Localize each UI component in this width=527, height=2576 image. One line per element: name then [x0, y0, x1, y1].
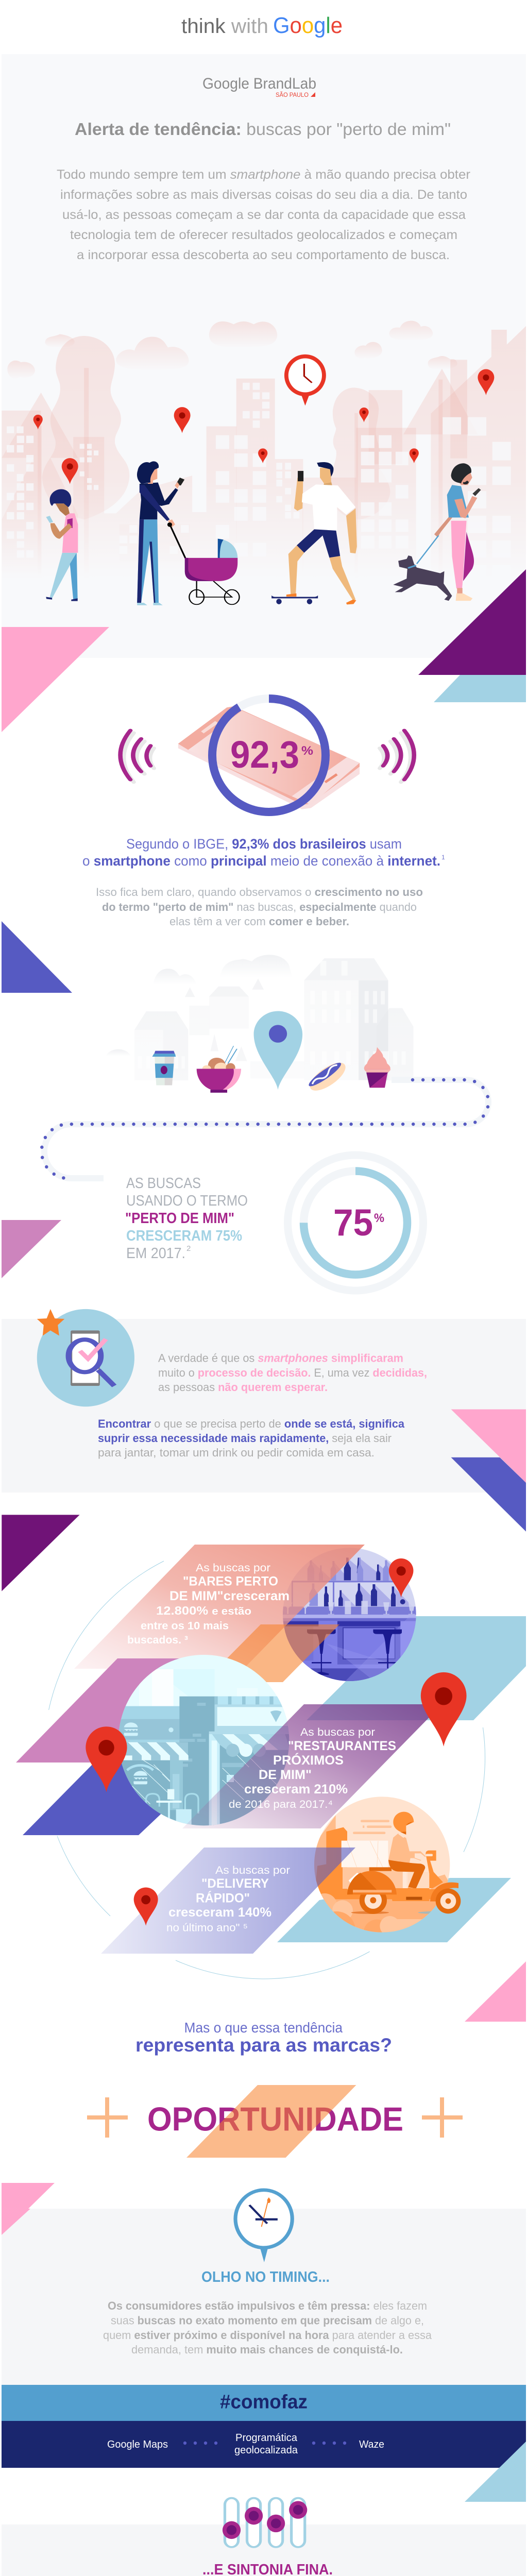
front wheel — [430, 1883, 458, 1902]
text: perto de mim growth: elas têm a ver com comer e beber. — [169, 915, 349, 928]
text: timing paragraph — [103, 2299, 432, 2356]
text: programática geolocalizada — [234, 2432, 298, 2456]
decoration: pink triangle right — [465, 1961, 526, 2022]
icons: food and drink — [152, 1046, 391, 1096]
ice cream — [364, 1047, 391, 1088]
decoration: blue triangle — [2, 921, 72, 993]
panel: intro background — [2, 54, 526, 658]
intro text block: usá-lo, as pessoas começam a se dar conta da capacidade que essa — [62, 208, 466, 222]
text: IBGE smartphone stat: Segundo o IBGE, 92,3% dos brasileiros usam — [126, 836, 402, 852]
light blue parallelogram — [307, 1616, 526, 1720]
text: Google Maps: Google Maps — [107, 2439, 168, 2450]
donut chart: 75%: % — [374, 1211, 384, 1225]
decoration: corner shapes top — [2, 569, 526, 732]
clouds — [7, 321, 457, 379]
text: restaurantes stat: DE MIM" — [259, 1768, 312, 1782]
coffee cup — [152, 1051, 176, 1086]
text: restaurantes stat: cresceram 210% — [244, 1782, 348, 1797]
panel: restaurantes próximos — [16, 1654, 467, 1835]
right storefront — [209, 1732, 292, 1734]
intro text block: Todo mundo sempre tem um smartphone à mão quando precisa obter — [57, 167, 470, 182]
icons: location pins — [33, 369, 494, 484]
text: perto de mim growth — [96, 886, 423, 928]
scooter body — [390, 1851, 443, 1901]
text: IBGE smartphone stat — [82, 836, 445, 869]
gradient parallelogram — [101, 1848, 355, 1954]
pins — [86, 1672, 467, 1792]
donut chart: 92.3%: % — [301, 744, 313, 758]
heading: olho no timing: OLHO NO TIMING... — [201, 2269, 330, 2285]
rider — [388, 1833, 426, 1867]
text: restaurantes stat: de 2016 para 2017.⁴ — [229, 1799, 333, 1810]
mauve parallelogram — [16, 1658, 215, 1762]
text: smartphones simplified: as pessoas não querem esperar. — [158, 1381, 328, 1394]
text: timing paragraph: Os consumidores estão impulsivos e têm pressa: eles fazem — [108, 2299, 427, 2312]
bottle shadows — [308, 1557, 412, 1606]
illustration: grey city with food and pin — [106, 955, 413, 1090]
decoration: pink triangle over panel — [2, 2209, 30, 2235]
text: buscas cresceram 75%: AS BUSCAS — [126, 1175, 201, 1192]
text: perto de mim growth: Isso fica bem claro, quando observamos o crescimento no uso — [96, 886, 423, 899]
decoration: pink triangle left — [2, 2183, 55, 2235]
text: buscas cresceram 75%: 2 — [186, 1244, 191, 1253]
decoration: right corner shapes — [2, 1410, 526, 1591]
rear fender — [349, 1873, 360, 1884]
person: woman with stroller — [137, 461, 240, 605]
donut chart: 75%: 75 — [333, 1202, 373, 1244]
logo: think with Google: Google — [273, 13, 343, 38]
illustration: delivery scooter — [314, 1797, 461, 1933]
icon: red clock — [284, 354, 326, 405]
text: restaurantes stat: PRÓXIMOS — [273, 1752, 344, 1768]
text: delivery stat: RÁPIDO" — [196, 1891, 250, 1905]
text: smartphones simplified: muito o processo de decisão. E, uma vez decididas, — [158, 1366, 427, 1379]
text: encontrar perto — [98, 1417, 405, 1459]
illustration: bar — [282, 1547, 418, 1681]
text: bares perto de mim stat: As buscas por — [196, 1562, 270, 1574]
text: encontrar perto: Encontrar o que se precisa perto de onde se está, significa — [98, 1417, 405, 1430]
panel: delivery rápido — [101, 1795, 511, 1954]
left awning — [118, 1742, 188, 1760]
person: woman walking dog — [393, 463, 481, 601]
panel: decision process — [2, 1319, 526, 1493]
text: buscas cresceram 75% — [125, 1175, 248, 1262]
burger sign lower — [133, 1771, 147, 1784]
decoration: light blue triangle — [465, 2442, 526, 2502]
panel: sintonia fina — [2, 2524, 526, 2576]
icon: magnifier over phone with star — [37, 1309, 134, 1406]
text: bares perto de mim stat: DE MIM"cresceram — [169, 1589, 290, 1603]
logo: Google BrandLab São Paulo: SÃO PAULO — [276, 91, 309, 98]
panel: #comofaz blue — [2, 2385, 526, 2468]
text: smartphones simplified: A verdade é que os smartphones simplificaram — [158, 1352, 403, 1364]
text: bares perto de mim stat — [127, 1562, 290, 1646]
logo: think with Google: think with — [181, 15, 268, 38]
person: child with phone — [46, 489, 78, 601]
illustration: pale city skyline — [2, 321, 526, 601]
text: restaurantes stat: "RESTAURANTES — [288, 1739, 396, 1753]
text: Waze: Waze — [359, 2439, 384, 2450]
text: restaurantes stat: As buscas por — [300, 1726, 375, 1738]
text: bares perto de mim stat: "BARES PERTO — [183, 1574, 278, 1589]
grey clouds — [106, 955, 293, 1056]
title: Alerta de tendência: buscas por "perto de mim" — [75, 120, 451, 139]
text: buscas cresceram 75%: USANDO O TERMO — [126, 1193, 248, 1209]
bottles — [324, 1557, 396, 1606]
logo: Google BrandLab São Paulo: Google BrandLab — [202, 75, 316, 92]
text: timing paragraph: quem estiver próximo e disponível na hora para atender a essa — [103, 2329, 432, 2342]
donut chart: 75% — [287, 1155, 423, 1291]
donut chart: 92.3%: 92,3 — [230, 733, 299, 776]
icon: blue clock — [233, 2188, 294, 2262]
panel: olho no timing — [2, 2209, 526, 2385]
stools — [307, 1630, 402, 1675]
shelves — [292, 1581, 416, 1582]
heading: what it means for brands — [135, 2020, 392, 2056]
text: smartphones simplified — [158, 1352, 427, 1394]
table and chairs — [146, 1794, 198, 1814]
pin — [389, 1558, 413, 1598]
intro text block: tecnologia tem de oferecer resultados geolocalizados e começam — [70, 228, 457, 242]
gradient parallelogram — [74, 1545, 365, 1669]
gradient parallelogram — [182, 1704, 442, 1828]
callout: oportunidade: OPORTUNIDADE — [147, 2100, 403, 2138]
trees — [38, 336, 443, 601]
text: delivery stat: As buscas por — [215, 1865, 290, 1876]
text: buscas cresceram 75%: CRESCERAM 75% — [126, 1228, 242, 1244]
dark wall — [179, 1697, 215, 1827]
icon: plus right — [422, 2097, 463, 2138]
decoration: thin circle arcs — [49, 1561, 485, 1979]
rear wheel — [360, 1887, 387, 1914]
text: programática geolocalizada: Programática — [235, 2432, 298, 2444]
intro text block: a incorporar essa descoberta ao seu comportamento de busca. — [77, 248, 450, 262]
text: IBGE smartphone stat: o smartphone como principal meio de conexão à internet. — [82, 853, 440, 869]
text: restaurantes stat — [229, 1726, 396, 1810]
illustration: phone with signal waves — [121, 706, 414, 809]
illustration: restaurant — [117, 1654, 292, 1827]
text: timing paragraph: demanda, tem muito mais chances de conquistá-lo. — [131, 2343, 403, 2356]
large pin — [254, 1011, 302, 1090]
dotted route — [42, 1080, 488, 1178]
heading: what it means for brands: representa para as marcas? — [135, 2035, 392, 2056]
text: delivery stat: no último ano" ⁵ — [166, 1922, 248, 1934]
donut chart: 92.3% — [212, 699, 326, 812]
text: bares perto de mim stat: buscados. ³ — [127, 1634, 188, 1646]
panel: bares perto de mim — [74, 1545, 526, 1720]
text: perto de mim growth: do termo "perto de mim" nas buscas, especialmente quando — [102, 901, 417, 913]
signal waves left and right — [121, 731, 414, 782]
text: programática geolocalizada: geolocalizada — [234, 2445, 298, 2456]
icon: sliders — [223, 2498, 307, 2547]
intro text block — [57, 167, 470, 262]
burger sign top — [124, 1722, 138, 1736]
decoration: mauve triangle — [2, 1220, 61, 1278]
text: bares perto de mim stat: 12.800% e estão — [156, 1604, 251, 1617]
blue parallelogram — [23, 1762, 215, 1835]
buildings — [2, 326, 526, 579]
text: delivery stat — [166, 1865, 290, 1934]
windows — [7, 383, 511, 581]
text: encontrar perto: suprir essa necessidade mais rapidamente, seja ela sair — [98, 1432, 392, 1445]
text: buscas cresceram 75%: EM 2017. — [126, 1245, 185, 1262]
person: skateboarder with phone — [271, 462, 357, 604]
glasses — [283, 1601, 415, 1615]
text: bares perto de mim stat: entre os 10 mais — [141, 1620, 229, 1632]
left storefront — [122, 1760, 179, 1822]
dots — [183, 2442, 346, 2445]
buildings — [314, 1827, 347, 1900]
intro text block: informações sobre as mais diversas coisas do seu dia a dia. De tanto — [60, 188, 467, 202]
orange parallelogram — [203, 1624, 339, 1682]
text: timing paragraph: suas buscas no exato momento em que precisam de algo e, — [111, 2314, 424, 2327]
heading: what it means for brands: Mas o que essa tendência — [184, 2020, 343, 2036]
bar top and front — [282, 1615, 417, 1618]
logo: think with Google — [181, 13, 343, 38]
text: delivery stat: "DELIVERY — [201, 1876, 269, 1891]
noodle bowl — [197, 1046, 241, 1093]
text: delivery stat: cresceram 140% — [168, 1905, 271, 1920]
parcel box — [342, 1841, 388, 1867]
ground — [319, 1889, 435, 1900]
back counter — [282, 1606, 417, 1615]
grey buildings — [134, 958, 413, 1080]
text lines behind rider — [353, 1820, 392, 1834]
left building sign — [119, 1706, 179, 1742]
phone — [178, 706, 360, 809]
text: encontrar perto: para jantar, tomar um drink ou pedir comida em casa. — [98, 1446, 375, 1459]
panel: #comofaz blue: #comofaz — [220, 2392, 308, 2413]
pin — [134, 1887, 158, 1926]
callout: oportunidade — [87, 2085, 463, 2158]
hot dog — [305, 1058, 350, 1096]
right shop upper — [215, 1697, 290, 1733]
text: buscas cresceram 75%: "PERTO DE MIM" — [125, 1210, 234, 1227]
text: IBGE smartphone stat: 1 — [441, 854, 445, 861]
icon: plus left — [87, 2097, 128, 2138]
light blue parallelogram — [277, 1878, 511, 1942]
